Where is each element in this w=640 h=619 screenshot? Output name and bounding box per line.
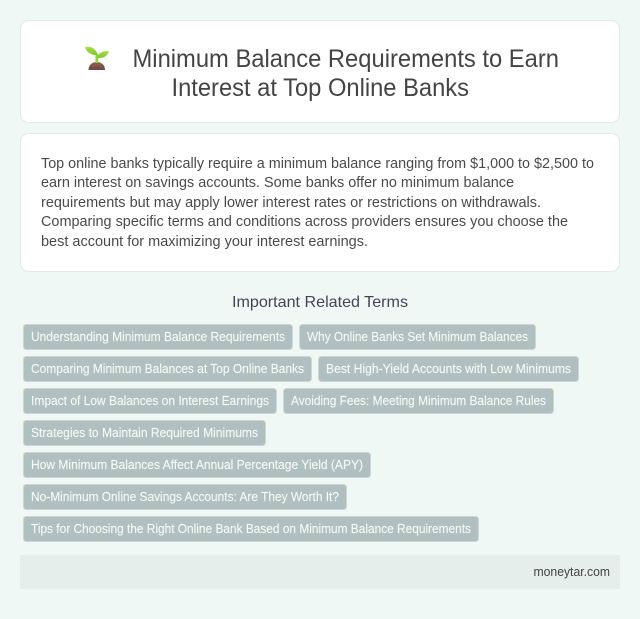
- panel: summary text: [20, 134, 620, 272]
- tag: Understanding Minimum Balance Requirements: [31, 330, 285, 344]
- heading: related terms: Important Related Terms: [232, 294, 408, 311]
- tag: Comparing Minimum Balances at Top Online Banks: [31, 362, 304, 376]
- tag: Avoiding Fees: Meeting Minimum Balance Rules: [291, 394, 546, 408]
- tag: [24, 388, 276, 414]
- tag: [300, 324, 536, 350]
- tag: Strategies to Maintain Required Minimums: [31, 426, 258, 440]
- tag: How Minimum Balances Affect Annual Percentage Yield (APY): [31, 458, 363, 472]
- footer site name: moneytar.com: [534, 565, 610, 579]
- summary paragraph: Comparing specific terms and conditions across providers ensures you choose the: [41, 214, 568, 230]
- tag: Impact of Low Balances on Interest Earnings: [31, 394, 269, 408]
- tag: Best High-Yield Accounts with Low Minimums: [326, 362, 571, 376]
- summary paragraph: requirements but may apply lower interest rates or restrictions on withdrawals.: [41, 195, 541, 211]
- title: Interest at Top Online Banks: [172, 74, 469, 102]
- tag: Tips for Choosing the Right Online Bank Based on Minimum Balance Requirements: [31, 522, 471, 536]
- icon: sprout: [85, 47, 109, 70]
- tag: [318, 356, 578, 382]
- related terms tags: [24, 324, 578, 542]
- tag: [24, 484, 346, 510]
- header panel: [20, 20, 620, 122]
- tag: [24, 356, 312, 382]
- tag: [24, 516, 478, 542]
- title: Minimum Balance Requirements to Earn: [132, 45, 559, 73]
- tag: [24, 420, 266, 446]
- tag: Why Online Banks Set Minimum Balances: [307, 330, 528, 344]
- tag: [284, 388, 554, 414]
- summary paragraph: earn interest on savings accounts. Some banks offer no minimum balance: [41, 175, 514, 191]
- summary paragraph: best account for maximizing your interest earnings.: [41, 234, 368, 250]
- tag: [24, 452, 370, 478]
- summary paragraph: Top online banks typically require a minimum balance ranging from $1,000 to $2,500 to: [41, 156, 594, 172]
- title: [132, 45, 559, 102]
- tag: [24, 324, 292, 350]
- footer bar: [20, 555, 620, 589]
- tag: No-Minimum Online Savings Accounts: Are They Worth It?: [31, 490, 339, 504]
- summary paragraph: [41, 156, 594, 250]
